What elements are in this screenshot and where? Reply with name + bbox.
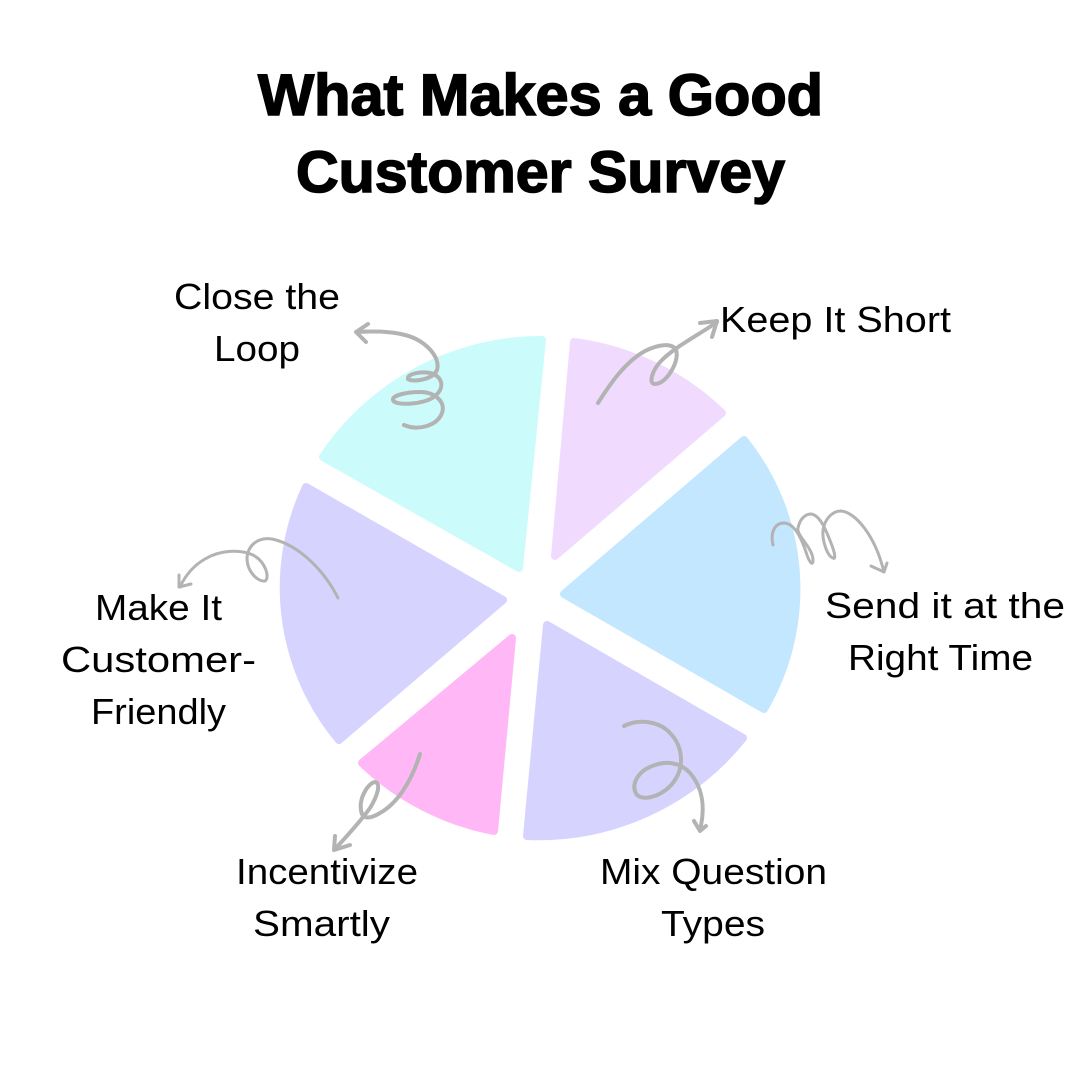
label: close the loop: Loop [214, 328, 300, 369]
label: make it customer-friendly: Customer- [61, 639, 256, 680]
label: send it at the right time: Right Time [848, 637, 1033, 678]
label: incentivize smartly [236, 851, 418, 944]
label: mix question types: Mix Question [600, 851, 827, 892]
label: incentivize smartly: Smartly [253, 903, 390, 944]
slice: mix question types [527, 625, 743, 836]
slice: make it customer-friendly [284, 487, 503, 740]
slice: incentivize smartly [362, 638, 512, 831]
slice: keep it short [555, 342, 722, 556]
label: incentivize smartly: Incentivize [236, 851, 418, 892]
label: mix question types: Types [661, 903, 765, 944]
arrow: close the loop [356, 324, 443, 428]
pie chart [284, 340, 796, 836]
label: make it customer-friendly: Make It [95, 587, 222, 628]
label: make it customer-friendly [61, 587, 256, 732]
arrow: incentivize smartly [334, 754, 420, 850]
slice: close the loop [323, 340, 542, 568]
label: make it customer-friendly: Friendly [91, 691, 226, 732]
title: Customer Survey [296, 140, 785, 205]
label: mix question types [600, 851, 827, 944]
label: send it at the right time [825, 585, 1065, 678]
title [258, 63, 823, 205]
label: close the loop [174, 276, 340, 369]
label: send it at the right time: Send it at the [825, 585, 1065, 626]
arrow: keep it short [598, 321, 717, 403]
slice: send it at the right time [564, 440, 796, 709]
title: What Makes a Good [258, 63, 823, 128]
arrow: make it customer-friendly [179, 539, 338, 598]
label: close the loop: Close the [174, 276, 340, 317]
arrow: mix question types [624, 722, 706, 831]
label: keep it short: Keep It Short [720, 299, 951, 340]
arrow: send it at the right time [772, 511, 887, 572]
